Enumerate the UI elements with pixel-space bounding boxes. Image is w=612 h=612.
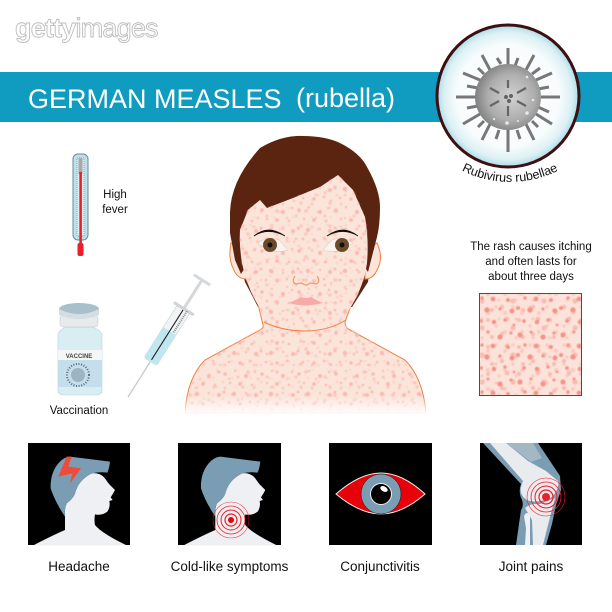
rash swatch — [480, 294, 582, 396]
hair — [201, 457, 260, 517]
pupil — [370, 484, 392, 504]
iris — [361, 474, 401, 514]
virus inner marks — [490, 80, 526, 116]
watermark logo: gettyimages — [15, 13, 158, 43]
thermometer — [73, 154, 88, 256]
fibula — [524, 513, 530, 545]
virus lens — [437, 25, 579, 167]
panel: conjunctivitis — [329, 443, 432, 545]
hair — [230, 136, 380, 274]
hair — [51, 457, 110, 517]
tibia — [525, 498, 555, 545]
virus body — [475, 64, 541, 130]
panel: joint pains — [480, 443, 582, 545]
label: joint pains: Joint pains — [499, 559, 564, 574]
syringe — [118, 272, 213, 403]
pain rings — [213, 502, 249, 538]
virus spikes — [456, 48, 560, 152]
left eye — [254, 230, 288, 252]
right eye — [323, 230, 358, 252]
vial label: VACCINE — [66, 354, 92, 360]
highlight — [379, 485, 389, 493]
vial virus — [67, 364, 89, 386]
torso and neck — [185, 300, 426, 413]
lightning — [58, 457, 81, 483]
title: GERMAN MEASLES — [28, 84, 282, 114]
label: cold-like symptoms: Cold-like symptoms — [171, 559, 289, 574]
subtitle: (rubella) — [296, 83, 395, 113]
nose — [293, 276, 319, 285]
child figure — [180, 136, 430, 418]
label: conjunctivitis: Conjunctivitis — [340, 559, 420, 574]
rash description: about three days — [488, 271, 574, 283]
rash description: and often lasts for — [485, 256, 577, 268]
femur and patella — [490, 443, 558, 502]
head silhouette — [33, 473, 127, 545]
mouth — [289, 297, 323, 306]
label: high fever: High — [103, 189, 127, 201]
red eye — [336, 473, 425, 514]
title banner — [0, 72, 612, 122]
ears — [230, 243, 380, 279]
back hair — [241, 268, 370, 307]
vaccine vial — [58, 303, 102, 395]
panel: cold-like symptoms — [178, 443, 281, 545]
rash description: The rash causes itching — [470, 241, 592, 253]
virus name curved: Rubivirus rubellae — [462, 163, 558, 182]
label: vaccination: Vaccination — [50, 405, 108, 417]
pain rings — [527, 478, 565, 516]
label: headache: Headache — [48, 559, 110, 574]
soft tissue — [483, 443, 561, 545]
panel: headache — [28, 443, 130, 545]
face — [240, 175, 368, 331]
fade — [180, 396, 430, 418]
label: high fever: fever — [102, 204, 128, 216]
head silhouette — [184, 473, 277, 545]
muscle — [506, 443, 542, 462]
